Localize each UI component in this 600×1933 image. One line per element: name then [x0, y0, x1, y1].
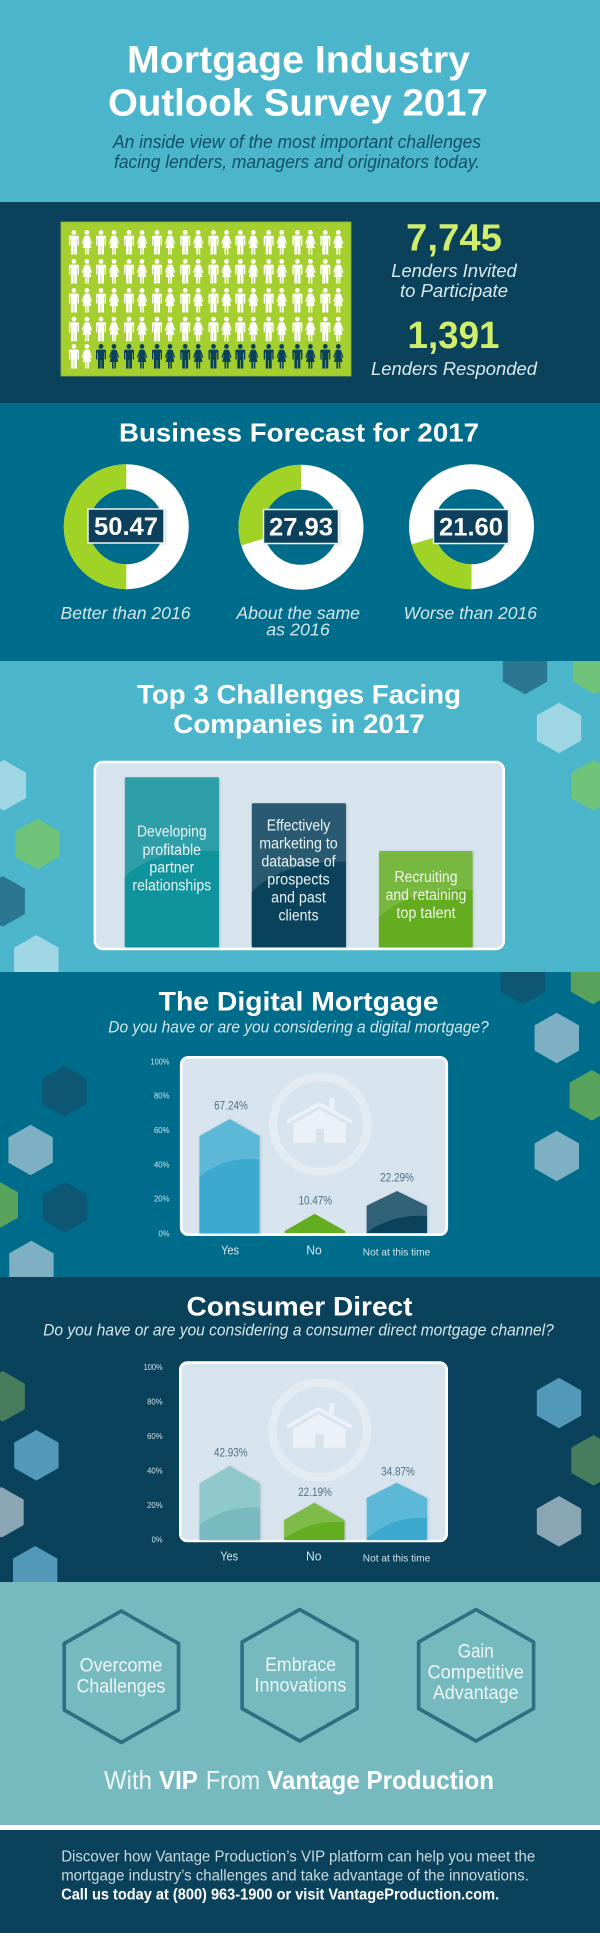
title [108, 40, 488, 125]
hexagon: embrace innovations: Embrace [265, 1655, 336, 1676]
hexagon: gain competitive advantage [419, 1610, 534, 1741]
donut: better than 2016: Better than 2016 [60, 603, 191, 623]
icon: house in circle [272, 1383, 367, 1477]
hexagon: overcome challenges: Challenges [77, 1677, 165, 1698]
category labels: No [306, 1244, 322, 1258]
donut: better than 2016 [60, 477, 191, 623]
stat: lenders invited: 7,745 [406, 218, 502, 260]
donut: about the same: as 2016 [266, 620, 330, 640]
stat: lenders responded: 1,391 [408, 315, 500, 357]
bar: recruiting top talent [379, 851, 473, 947]
heading: Top 3 Challenges Facing [137, 679, 461, 709]
heading: Consumer Direct [186, 1291, 413, 1321]
question: Do you have or are you considering a digital mortgage? [108, 1018, 489, 1037]
panel: survey participation [0, 202, 600, 403]
category labels: Not at this time [363, 1246, 430, 1258]
heading: Companies in 2017 [173, 709, 425, 739]
bar chart: digital mortgage: 0% [158, 1229, 170, 1238]
bar: effectively marketing: clients [278, 908, 319, 925]
bar: effectively marketing: and past [271, 890, 326, 907]
bar chart: consumer direct: 80% [147, 1397, 163, 1406]
bar: not at this time [367, 1173, 427, 1233]
people grid [61, 222, 351, 376]
donut: about the same: About the same [235, 603, 360, 623]
hexagon: overcome challenges [64, 1611, 178, 1742]
panel: footer call to action [0, 1830, 600, 1933]
bar: yes [199, 1448, 260, 1540]
stat: lenders responded [371, 315, 538, 379]
subtitle [112, 132, 481, 172]
stat: lenders invited: Lenders Invited [391, 261, 518, 281]
hexagon: gain competitive advantage: Advantage [433, 1683, 519, 1704]
tagline [104, 1765, 494, 1795]
hexagon: gain competitive advantage: Competitive [428, 1662, 524, 1683]
subtitle: facing lenders, managers and originators today. [114, 152, 480, 172]
bar: yes [199, 1100, 260, 1233]
bar chart: digital mortgage: 20% [154, 1195, 170, 1204]
donut: about the same [235, 477, 360, 640]
panel: top 3 challenges [0, 644, 600, 986]
hexagon: embrace innovations: Innovations [254, 1676, 346, 1697]
bar: not at this time: 34.87% [381, 1466, 415, 1478]
panel: the digital mortgage [0, 954, 600, 1291]
category labels: Yes [220, 1550, 238, 1564]
bar: no [285, 1196, 345, 1233]
title: Mortgage Industry [127, 40, 470, 82]
panel: business forecast [0, 403, 600, 661]
icon: house in circle [273, 1077, 368, 1172]
tagline: Vantage Production [267, 1765, 494, 1795]
panel: footer call to action: Call us today at (800) 963-1900 or visit VantageProduction.com. [61, 1887, 499, 1904]
stat: lenders invited: to Participate [400, 281, 508, 301]
tagline: With [104, 1765, 152, 1795]
bar chart: consumer direct: 0% [152, 1535, 163, 1544]
bar: yes: 67.24% [214, 1100, 248, 1112]
category labels: Not at this time [363, 1552, 430, 1564]
bar chart: digital mortgage: 60% [154, 1126, 170, 1135]
bar: not at this time: 22.29% [380, 1173, 414, 1185]
category labels: Yes [221, 1244, 239, 1258]
donut: worse than 2016: 21.60 [439, 514, 503, 542]
subtitle: An inside view of the most important challenges [112, 132, 481, 152]
tagline: VIP [159, 1765, 198, 1795]
question: Do you have or are you considering a consumer direct mortgage channel? [43, 1321, 554, 1340]
bar chart: consumer direct [144, 1363, 447, 1564]
bar: yes: 42.93% [214, 1448, 248, 1460]
bar: effectively marketing: marketing to [259, 836, 338, 853]
bar: developing partner relationships [125, 777, 219, 947]
category labels: No [306, 1550, 322, 1564]
bar: no [284, 1487, 344, 1540]
bar: effectively marketing: prospects [267, 872, 330, 889]
donut: better than 2016: 50.47 [94, 513, 158, 541]
panel: header [0, 0, 600, 203]
panel: consumer direct [0, 1296, 600, 1582]
bar: recruiting top talent: Recruiting [394, 869, 458, 886]
stat: lenders responded: Lenders Responded [371, 359, 538, 379]
bar: effectively marketing [252, 803, 346, 947]
hexagon: overcome challenges: Overcome [80, 1656, 162, 1677]
donut: worse than 2016: Worse than 2016 [404, 603, 537, 623]
category labels [221, 1244, 430, 1258]
bar: not at this time [367, 1466, 427, 1540]
panel: footer call to action: mortgage industry’s challenges and take advantage of the innovations. [61, 1868, 529, 1885]
bar chart: consumer direct: 100% [144, 1363, 163, 1372]
bar chart: consumer direct: 20% [147, 1501, 163, 1510]
donut: about the same: 27.93 [269, 514, 333, 542]
bar chart: digital mortgage [150, 1057, 447, 1258]
stat: lenders invited [391, 218, 518, 301]
category labels [220, 1550, 430, 1564]
bar: effectively marketing: database of [261, 854, 336, 871]
heading: Business Forecast for 2017 [119, 418, 479, 448]
bar: effectively marketing: Effectively [267, 818, 330, 835]
panel: footer call to action: Discover how Vantage Production’s VIP platform can help you meet the [61, 1849, 535, 1866]
heading: The Digital Mortgage [159, 987, 439, 1017]
bar: developing partner relationships: partner [149, 860, 194, 877]
bar chart: consumer direct: 60% [147, 1432, 163, 1441]
bar chart: consumer direct: 40% [147, 1466, 163, 1475]
title: Outlook Survey 2017 [108, 83, 488, 125]
bar: developing partner relationships: relationships [132, 878, 211, 895]
bar: recruiting top talent: and retaining [386, 887, 466, 904]
bar chart: digital mortgage: 100% [150, 1057, 170, 1066]
challenges card [95, 762, 504, 949]
bar: no: 10.47% [298, 1196, 332, 1208]
bar: developing partner relationships: Developing [137, 824, 207, 841]
bar: developing partner relationships: profitable [143, 842, 201, 859]
heading [137, 679, 461, 739]
tagline: From [206, 1765, 260, 1795]
panel: benefits [0, 1582, 600, 1825]
bar chart: digital mortgage: 80% [154, 1092, 170, 1101]
hexagon: embrace innovations [242, 1610, 357, 1741]
bar: recruiting top talent: top talent [396, 905, 456, 922]
bar: no: 22.19% [298, 1487, 332, 1499]
hexagon: gain competitive advantage: Gain [458, 1641, 494, 1662]
bar chart: digital mortgage: 40% [154, 1160, 170, 1169]
donut: worse than 2016 [404, 477, 537, 623]
